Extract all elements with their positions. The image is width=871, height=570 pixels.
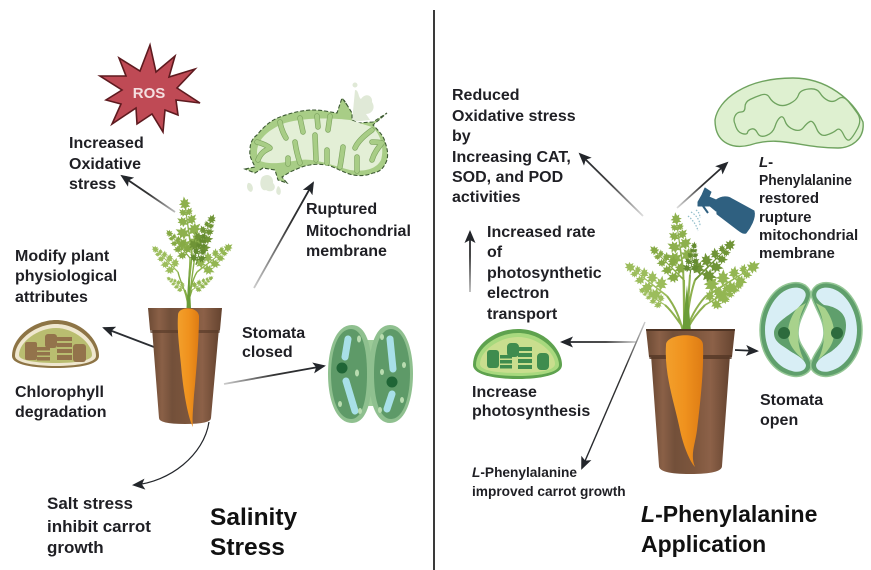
carrot bbox=[666, 335, 703, 467]
icon: closed stomata bbox=[328, 325, 413, 423]
text: L-phenylalanine restored membrane: L- bbox=[759, 154, 773, 171]
icon: ruptured mitochondrion bbox=[245, 82, 388, 195]
text: L-phenylalanine improved carrot growth: improved carrot growth bbox=[472, 484, 626, 499]
text: L-phenylalanine restored membrane: Phenylalanine bbox=[759, 172, 852, 189]
icon: healthy carrot plant in pot bbox=[615, 210, 771, 474]
text: increase photosynthesis: Increase bbox=[472, 384, 537, 401]
guard cell: right bbox=[811, 283, 862, 376]
icon: ROS burst bbox=[100, 45, 200, 132]
text: reduced oxidative stress: Reduced bbox=[452, 87, 520, 104]
text: stomata closed: closed bbox=[242, 344, 293, 361]
heading: L-phenylalanine application: Application bbox=[641, 531, 766, 557]
text: modify plant attributes: physiological bbox=[15, 268, 117, 285]
arrow: plant to mitochondrion bbox=[677, 163, 727, 208]
text: reduced oxidative stress: SOD, and POD bbox=[452, 169, 563, 186]
text: increased photosynthetic electron transport: transport bbox=[487, 306, 558, 323]
arrow: plant to oxidative stress bbox=[122, 176, 175, 212]
arrow: pot to closed stomata bbox=[224, 366, 324, 384]
arrow: upward to electron transport bbox=[469, 232, 471, 292]
debris bbox=[247, 82, 374, 195]
icon: ROS burst: ROS bbox=[133, 85, 165, 102]
text: salt stress inhibit carrot growth: inhibit carrot bbox=[47, 517, 151, 536]
arrow: plant to reduced oxidative stress bbox=[580, 154, 643, 216]
text: increased photosynthetic electron transport: Increased rate bbox=[487, 224, 596, 241]
carrot bbox=[178, 308, 199, 427]
text: reduced oxidative stress: by bbox=[452, 128, 471, 145]
text: increase photosynthesis: photosynthesis bbox=[472, 403, 590, 420]
icon: degraded chloroplast bbox=[12, 320, 99, 368]
icon: healthy mitochondrion bbox=[715, 78, 863, 148]
heading: salinity stress: Stress bbox=[210, 534, 285, 561]
icon: spray bottle bbox=[688, 188, 754, 233]
text: increased photosynthetic electron transport: electron bbox=[487, 285, 549, 302]
heading: L-phenylalanine application: L-Phenylalanine bbox=[641, 501, 817, 527]
text: ruptured mitochondrial membrane: Ruptured bbox=[306, 201, 377, 218]
icon: open stomata bbox=[760, 283, 862, 376]
text: L-phenylalanine restored membrane: restored bbox=[759, 190, 819, 207]
text: stomata open: Stomata bbox=[760, 392, 823, 409]
text: L-phenylalanine improved carrot growth: L-Phenylalanine bbox=[472, 465, 577, 480]
text: chlorophyll degradation: degradation bbox=[15, 404, 107, 421]
foliage bbox=[144, 194, 241, 308]
icon: healthy chloroplast bbox=[473, 329, 562, 379]
pot bbox=[646, 329, 735, 474]
guard cell: left bbox=[760, 283, 811, 376]
panel: salinity stress bbox=[12, 45, 413, 561]
text: L-phenylalanine restored membrane: membrane bbox=[759, 245, 835, 262]
text: L-phenylalanine restored membrane: mitochondrial bbox=[759, 227, 858, 244]
text: salt stress inhibit carrot growth: Salt stress bbox=[47, 494, 133, 513]
text: increased oxidative stress: stress bbox=[69, 176, 116, 193]
text: ruptured mitochondrial membrane: membrane bbox=[306, 243, 387, 260]
arrow: plant to improved growth bbox=[582, 322, 645, 468]
text: reduced oxidative stress: Oxidative stress bbox=[452, 108, 576, 125]
icon: stressed carrot plant in pot bbox=[144, 194, 241, 427]
text: increased photosynthetic electron transport: of bbox=[487, 244, 503, 261]
text: increased photosynthetic electron transport: photosynthetic bbox=[487, 265, 602, 282]
arrow: pot to chloroplast bbox=[104, 328, 154, 347]
text: increased oxidative stress: Increased bbox=[69, 135, 144, 152]
text: L-phenylalanine restored membrane: rupture bbox=[759, 209, 812, 226]
text: stomata open: open bbox=[760, 412, 798, 429]
arrow: curved to salt stress text bbox=[134, 422, 209, 485]
text: salt stress inhibit carrot growth: growth bbox=[47, 538, 104, 557]
foliage bbox=[615, 210, 771, 332]
arrow: pot to open stomata bbox=[735, 350, 757, 351]
text: reduced oxidative stress: activities bbox=[452, 189, 521, 206]
pot bbox=[148, 308, 222, 424]
text: increased oxidative stress: Oxidative bbox=[69, 156, 141, 173]
text: modify plant attributes: attributes bbox=[15, 289, 88, 306]
panel: L-phenylalanine application bbox=[452, 78, 863, 557]
arrow: plant to ruptured mitochondrion bbox=[254, 183, 313, 288]
text: chlorophyll degradation: Chlorophyll bbox=[15, 384, 104, 401]
text: ruptured mitochondrial membrane: Mitochondrial bbox=[306, 223, 411, 240]
text: reduced oxidative stress: Increasing CAT, bbox=[452, 149, 571, 166]
arrow: plant to chloroplast bbox=[562, 341, 636, 343]
text: modify plant attributes: Modify plant bbox=[15, 248, 109, 265]
heading: salinity stress: Salinity bbox=[210, 504, 297, 531]
text: stomata closed: Stomata bbox=[242, 325, 305, 342]
